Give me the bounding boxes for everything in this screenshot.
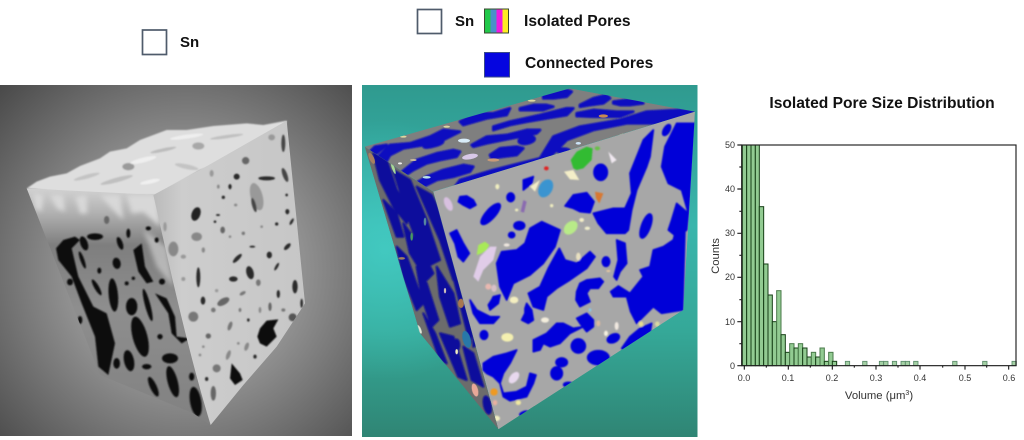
y axis labels: 10 [725, 317, 735, 327]
x axis labels: 0.3 [870, 373, 882, 383]
x axis title: Volume (μm [845, 390, 905, 402]
plot frame and ticks [737, 145, 1016, 370]
y axis labels: 50 [725, 140, 735, 150]
legend: Sn, centre panel [418, 10, 474, 34]
segmented cube right face [433, 112, 695, 429]
histogram bars [742, 145, 837, 366]
cube left face [26, 188, 204, 417]
x axis labels [738, 373, 1015, 383]
y axis labels: 30 [725, 228, 735, 238]
x axis labels: 0.5 [959, 373, 971, 383]
panel: grayscale Sn cube render [0, 85, 352, 436]
x axis labels: 0.4 [914, 373, 926, 383]
segmented cube top face [365, 88, 695, 195]
panel: segmented cube with coloured pores [362, 85, 698, 437]
legend: isolated pores: Isolated Pores [524, 13, 631, 30]
x axis labels: 0.0 [738, 373, 750, 383]
legend: isolated pores [484, 9, 631, 33]
chart title: Isolated Pore Size Distribution [769, 95, 995, 112]
legend: Sn, centre panel: Sn [455, 13, 474, 30]
cube right face [150, 117, 310, 430]
histogram: isolated pore size distribution [710, 140, 1016, 402]
segmented cube left face [365, 147, 498, 429]
x axis labels: 0.1 [782, 373, 794, 383]
x axis title: ) [909, 390, 913, 402]
legend: Sn, left panel: Sn [180, 34, 199, 51]
y axis labels [725, 140, 735, 371]
y axis labels: 0 [730, 361, 735, 371]
x axis labels: 0.2 [826, 373, 838, 383]
y axis labels: 20 [725, 272, 735, 282]
legend: Sn, left panel [142, 30, 199, 54]
y axis labels: 40 [725, 184, 735, 194]
y axis title: Counts [710, 238, 722, 274]
legend: connected pores: Connected Pores [525, 55, 654, 72]
x axis labels: 0.6 [1003, 373, 1015, 383]
x axis title: 3 [905, 390, 909, 397]
legend: connected pores [484, 52, 654, 77]
cube top face [27, 121, 287, 195]
